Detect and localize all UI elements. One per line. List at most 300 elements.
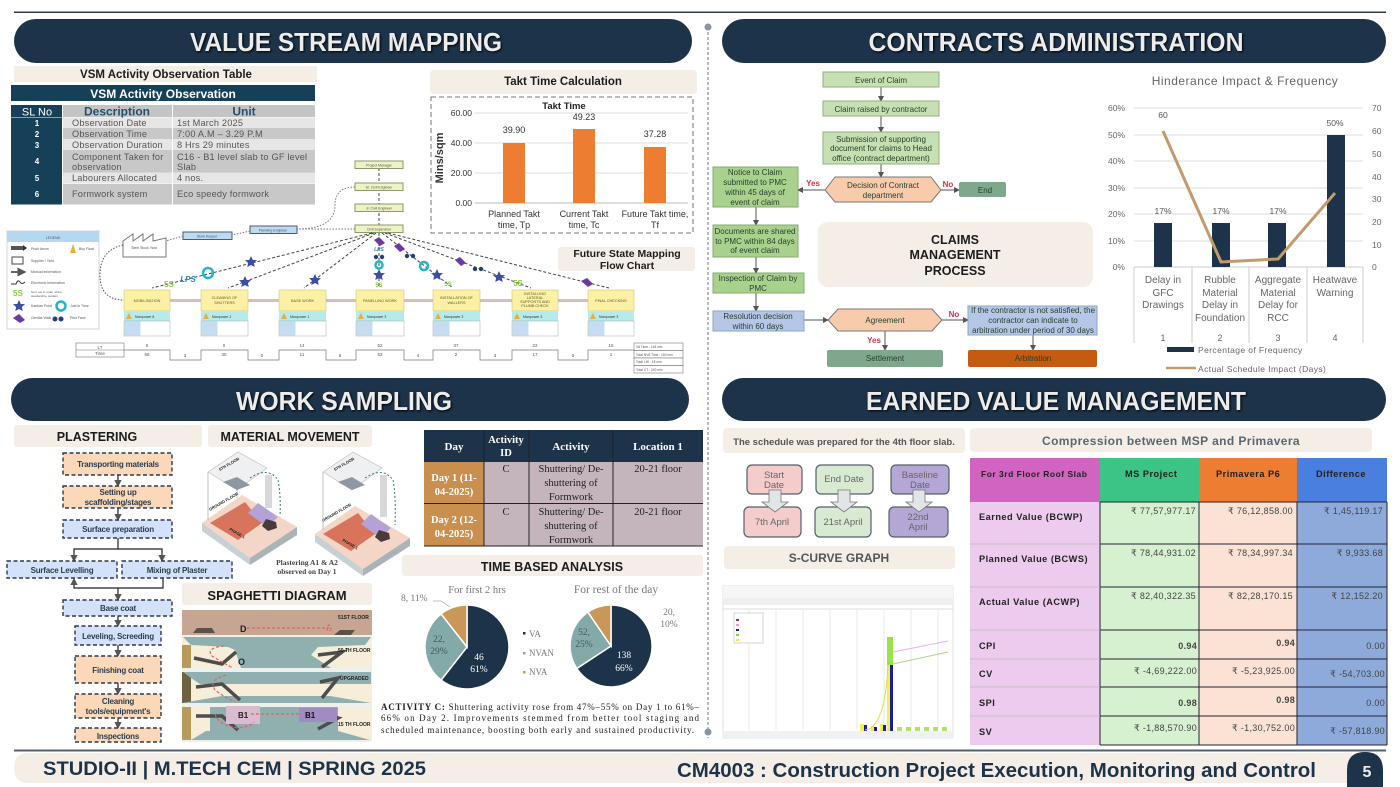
- hindrance impact chart: RCC: [1267, 313, 1289, 324]
- hindrance impact chart: 17%: [1154, 206, 1172, 216]
- comparison between MSP and Primavera: 0.00: [1366, 698, 1385, 708]
- takt time chart: 60.00: [451, 108, 472, 118]
- activity note: 66% on Day 2. Improvements stemmed from better tool staging and: [381, 713, 700, 723]
- hindrance impact chart: 30%: [1108, 183, 1125, 193]
- spaghetti diagram: O: [238, 657, 245, 667]
- comparison between MSP and Primavera: 0.94: [1276, 638, 1295, 648]
- timeline ladder: 15: [608, 343, 614, 348]
- takt time chart: time, Tc: [569, 220, 600, 230]
- comparison between MSP and Primavera: SV: [979, 727, 993, 737]
- footer: [14, 750, 1386, 787]
- comparison between MSP and Primavera: ₹ 82,28,170.15: [1228, 591, 1293, 601]
- hindrance impact chart: 20: [1372, 217, 1382, 227]
- comparison between MSP and Primavera: CV: [979, 669, 993, 679]
- plastering flow: Surface preparation: [82, 525, 154, 534]
- comparison between MSP and Primavera: Difference: [1316, 469, 1366, 479]
- process boxes: LATERAL: [527, 296, 543, 300]
- comparison between MSP and Primavera: ₹ 78,34,997.34: [1228, 548, 1293, 558]
- observation table: 5: [35, 174, 40, 183]
- hindrance impact chart: Rubble: [1204, 275, 1236, 286]
- claims flowchart: If the contractor is not satisfied, the: [971, 306, 1096, 315]
- hindrance impact chart: 70: [1372, 103, 1382, 113]
- hindrance impact chart: 10%: [1108, 236, 1125, 246]
- comparison between MSP and Primavera: ₹ 12,152.20: [1331, 591, 1383, 601]
- plastering flow: Mixing of Plaster: [147, 566, 207, 575]
- timeline ladder: [76, 343, 683, 373]
- hindrance impact chart: Aggregate: [1255, 275, 1302, 286]
- spaghetti diagram: B1: [238, 711, 249, 720]
- organisation chain: [100, 161, 403, 300]
- hindrance impact chart: Delay in: [1202, 300, 1238, 311]
- takt time chart: 49.23: [573, 112, 595, 122]
- activity table: 20-21 floor: [634, 507, 682, 518]
- process boxes: BASE WORK: [291, 299, 314, 303]
- claims flowchart: Event of Claim: [855, 76, 907, 85]
- claims flowchart: document for claims to Head: [830, 144, 932, 153]
- hindrance impact chart: Heatwave: [1313, 275, 1358, 286]
- activity table: Day 2 (12-: [431, 515, 478, 526]
- hindrance impact chart: Actual Schedule Impact (Days): [1198, 364, 1326, 374]
- observation table: 3: [35, 141, 40, 150]
- observation table: SL No: [22, 106, 52, 118]
- schedule dates: Date: [764, 480, 784, 491]
- comparison between MSP and Primavera: ₹ 9,933.68: [1337, 548, 1383, 558]
- plastering flow: Finishing coat: [92, 666, 144, 675]
- hindrance impact chart: 17%: [1269, 206, 1287, 216]
- timeline ladder: 17: [532, 352, 538, 357]
- legend: Just in Time: [70, 304, 89, 308]
- claims flowchart: Agreement: [865, 316, 905, 325]
- activity table: shuttering of: [544, 521, 598, 532]
- timeline ladder: 6: [339, 353, 342, 358]
- page number: [1347, 752, 1383, 787]
- schedule dates: 22nd: [907, 512, 929, 523]
- time based analysis: TIME BASED ANALYSIS: [481, 560, 623, 574]
- process boxes: Manpower 3: [367, 315, 386, 319]
- future state label: Future State Mapping: [573, 248, 681, 260]
- information lines and kaizen markers: 5S: [164, 280, 175, 289]
- claims flowchart: Submission of supporting: [836, 135, 926, 144]
- activity table: C: [502, 464, 510, 475]
- timeline ladder: 14: [299, 343, 305, 348]
- activity table: Shuttering/ De-: [538, 464, 604, 475]
- observation table: 7:00 A.M – 3.29 P.M: [177, 129, 263, 139]
- comparison between MSP and Primavera: ₹ 77,57,977.17: [1131, 506, 1196, 516]
- activity note: ACTIVITY C: Shuttering activity rose from 47%–55% on Day 1 to 61%–: [381, 702, 700, 712]
- hindrance impact chart: Delay in: [1145, 275, 1181, 286]
- process boxes: CLEANING OF: [212, 296, 238, 300]
- hindrance impact chart: 40: [1372, 172, 1382, 182]
- process boxes: PANELLING WORK: [363, 299, 397, 303]
- time based analysis: 138: [617, 651, 631, 661]
- timeline ladder: 1: [610, 352, 613, 357]
- schedule dates: The schedule was prepared for the 4th floor slab.: [733, 437, 955, 448]
- observation table: VSM Activity Observation: [90, 87, 236, 101]
- comparison between MSP and Primavera: 0.98: [1178, 698, 1197, 708]
- observation table: 2: [35, 130, 40, 139]
- comparison between MSP and Primavera: Planned Value (BCWS): [979, 554, 1088, 564]
- claims flowchart: Inspection of Claim by: [719, 274, 797, 283]
- hindrance impact chart: 50%: [1108, 130, 1125, 140]
- schedule dates: Date: [910, 480, 930, 491]
- timeline ladder: LT: [98, 345, 103, 350]
- observation table: 6: [35, 190, 40, 199]
- observation table: VSM Activity Observation Table: [80, 69, 252, 81]
- pie legend: VA: [529, 629, 541, 639]
- claims flowchart: No: [949, 310, 959, 319]
- time based analysis: 25%: [575, 640, 593, 650]
- hindrance impact chart: Drawings: [1142, 300, 1184, 311]
- activity table: 20-21 floor: [634, 464, 682, 475]
- hindrance impact chart: Warning: [1317, 288, 1353, 299]
- claims flowchart: office (contract department): [832, 154, 930, 163]
- observation table: Slab: [177, 162, 196, 172]
- organisation chain: Civil Supervisor: [367, 228, 392, 232]
- comparison between MSP and Primavera: Compression between MSP and Primavera: [1042, 434, 1300, 448]
- timeline ladder: Total LHI : 18 min: [636, 360, 662, 364]
- footer: CM4003 : Construction Project Execution, Monitoring and Control: [677, 759, 1316, 782]
- timeline ladder: Total CT : 240 min: [636, 368, 663, 372]
- hindrance impact chart: 2: [1217, 333, 1223, 343]
- plastering flow: Surface Levelling: [31, 566, 94, 575]
- hindrance impact chart: 60%: [1108, 103, 1125, 113]
- timeline ladder: 3: [494, 353, 497, 358]
- panel: work sampling: [7, 378, 703, 742]
- pie legend: NVA: [529, 667, 548, 677]
- pie legend: NVAN: [529, 648, 554, 658]
- takt time chart: 37.28: [644, 129, 666, 139]
- claims management label: MANAGEMENT: [910, 248, 1001, 262]
- isometric diagram A1: [202, 452, 297, 565]
- process boxes: Manpower 3: [599, 315, 618, 319]
- hindrance impact chart: Hinderance Impact & Frequency: [1152, 74, 1338, 88]
- process boxes: FINAL CHECKING: [595, 299, 627, 303]
- hindrance impact chart: 3: [1275, 333, 1281, 343]
- time based analysis: 29%: [430, 647, 448, 657]
- activity table: Activity: [552, 441, 590, 453]
- claims flowchart: End: [978, 186, 992, 195]
- hindrance impact chart: GFC: [1152, 288, 1174, 299]
- heading: contracts administration: [722, 19, 1386, 63]
- activity table: Location 1: [633, 441, 683, 453]
- timeline ladder: 0: [223, 343, 226, 348]
- organisation chain: Steel Stock Yard: [131, 246, 157, 250]
- schedule dates: 7th April: [755, 517, 789, 528]
- process boxes: [124, 290, 634, 336]
- isometric diagram A1: PHASE 1: [228, 527, 246, 540]
- information lines and kaizen markers: LPS: [180, 275, 196, 284]
- comparison between MSP and Primavera: ₹ 76,12,858.00: [1228, 506, 1293, 516]
- time based analysis: 52,: [578, 628, 590, 638]
- timeline ladder: 3: [184, 353, 187, 358]
- claims flowchart: Documents are shared: [715, 227, 795, 236]
- organisation chain: Sr. Civil Engineer: [366, 186, 393, 190]
- activity table: Formwork: [549, 535, 594, 546]
- time based analysis: [401, 555, 703, 689]
- plastering flow: Setting up: [99, 488, 137, 497]
- hindrance impact chart: 30: [1372, 194, 1382, 204]
- schedule dates: End Date: [824, 474, 864, 485]
- spaghetti diagram: B1: [305, 711, 316, 720]
- legend: 5S: [13, 289, 23, 298]
- claims flowchart: Settlement: [866, 354, 905, 363]
- schedule dates: Start: [764, 470, 784, 481]
- process boxes: SUPPORTS AND: [520, 300, 550, 304]
- comparison between MSP and Primavera: 0.98: [1276, 695, 1295, 705]
- process boxes: INSTALLATION OF: [440, 296, 474, 300]
- takt time chart: Tf: [651, 220, 659, 230]
- observation table: Observation Duration: [72, 140, 163, 150]
- timeline ladder: 37: [453, 343, 459, 348]
- activity table: ID: [500, 448, 512, 459]
- takt time chart: [430, 70, 697, 233]
- hindrance impact chart: 4: [1332, 333, 1338, 343]
- activity table: Shuttering/ De-: [538, 507, 604, 518]
- hindrance impact chart: 50: [1372, 149, 1382, 159]
- observation table: Observation Time: [72, 129, 147, 139]
- claims flowchart: arbitration under period of 30 days: [972, 326, 1094, 335]
- schedule dates: Baseline: [902, 470, 938, 481]
- timeline ladder: 68: [144, 352, 150, 357]
- takt time chart: 20.00: [451, 168, 472, 178]
- panel: value stream mapping: [7, 19, 697, 373]
- heading: value stream mapping: [14, 19, 692, 63]
- plastering flow: [7, 425, 232, 742]
- observation table: Unit: [232, 104, 256, 118]
- time based analysis: 46: [474, 653, 484, 663]
- time based analysis: 20,: [663, 608, 675, 618]
- takt time chart: time, Tp: [498, 220, 530, 230]
- hindrance impact chart: 0: [1372, 262, 1377, 272]
- observation table: 4 nos.: [177, 173, 203, 183]
- isometric diagram A1: 5TH FLOOR: [218, 456, 240, 472]
- hindrance impact chart: 40%: [1108, 156, 1125, 166]
- claims flowchart: PMC: [749, 284, 767, 293]
- information lines and kaizen markers: 5S: [513, 279, 524, 288]
- time based analysis: 66%: [615, 664, 633, 674]
- plastering flow: PLASTERING: [57, 430, 137, 444]
- legend: Pilot Face: [70, 316, 86, 320]
- s-curve graph: [723, 546, 955, 738]
- timeline ladder: 0: [261, 353, 264, 358]
- isometric diagram A2: [315, 452, 410, 576]
- claims flowchart: department: [863, 191, 904, 200]
- future state label: [558, 247, 695, 272]
- legend: Supplier / Yard: [31, 259, 54, 263]
- pie: first 2 hours: [425, 605, 509, 689]
- claims management label: [818, 222, 1093, 287]
- activity table: C: [502, 507, 510, 518]
- claims flowchart: Resolution decision: [723, 312, 793, 321]
- observation table: 1st March 2025: [177, 118, 243, 128]
- process boxes: Manpower 6: [135, 315, 154, 319]
- takt time chart: 39.90: [503, 125, 525, 135]
- hindrance impact chart: Foundation: [1195, 313, 1245, 324]
- legend: LEGEND: [46, 236, 61, 240]
- time based analysis: For first 2 hrs: [448, 585, 506, 596]
- takt time chart: Planned Takt: [488, 209, 540, 219]
- hindrance impact chart: 50%: [1326, 118, 1344, 128]
- comparison between MSP and Primavera: ₹ 82,40,322.35: [1131, 591, 1196, 601]
- spaghetti diagram: 15 TH FLOOR: [338, 722, 371, 728]
- information lines and kaizen markers: LPS: [374, 247, 385, 253]
- activity table: shuttering of: [544, 478, 598, 489]
- schedule dates: [723, 428, 965, 537]
- plastering flow: Leveling, Screeding: [82, 632, 154, 641]
- panel: contracts administration: [713, 19, 1386, 374]
- activity table: Day 1 (11-: [431, 473, 477, 484]
- claims flowchart: Decision of Contract: [847, 181, 920, 190]
- timeline ladder: 22: [532, 343, 538, 348]
- material movement: Plastering A1 & A2: [276, 558, 338, 567]
- observation table: Description: [84, 104, 150, 118]
- timeline ladder: 53: [377, 352, 383, 357]
- material movement: observed on Day 1: [278, 567, 337, 576]
- plastering flow: Transporting materials: [77, 460, 160, 469]
- activity table: [424, 430, 703, 546]
- isometric diagram A2: PHASE 1: [342, 538, 359, 551]
- claims flowchart: No: [943, 180, 953, 189]
- hindrance impact chart: 1: [1160, 333, 1166, 343]
- claims management label: CLAIMS: [931, 233, 979, 247]
- claims management label: PROCESS: [924, 264, 986, 278]
- legend: standardize, sustain: [31, 294, 58, 298]
- heading: contracts administration: CONTRACTS ADMINISTRATION: [868, 27, 1244, 57]
- heading: value stream mapping: VALUE STREAM MAPPING: [190, 27, 502, 57]
- claims flowchart: within 45 days of: [724, 188, 786, 197]
- takt time chart: 40.00: [451, 138, 472, 148]
- heading: work sampling: WORK SAMPLING: [236, 386, 452, 416]
- activity table: Activity: [488, 435, 525, 446]
- organisation chain: Store Keeper: [197, 234, 218, 238]
- process boxes: SHUTTERS: [214, 301, 235, 305]
- timeline ladder: 52: [377, 343, 383, 348]
- comparison between MSP and Primavera: MS Project: [1125, 469, 1177, 479]
- footer: STUDIO-II | M.TECH CEM | SPRING 2025: [43, 758, 426, 780]
- legend: Push Arrow: [31, 247, 49, 251]
- timeline ladder: Total NVA Time : 160 min: [636, 353, 673, 357]
- future state label: Flow Chart: [600, 260, 655, 272]
- activity table: 04-2025): [435, 487, 474, 498]
- plastering flow: tools/equipment's: [86, 707, 151, 716]
- comparison between MSP and Primavera: 0.94: [1178, 641, 1197, 651]
- legend: Buy Float: [79, 247, 94, 251]
- legend: Gemba Walk: [31, 316, 51, 320]
- observation table: 4: [35, 157, 40, 166]
- comparison between MSP and Primavera: ₹ 78,44,931.02: [1131, 548, 1196, 558]
- process boxes: Manpower 2: [212, 315, 231, 319]
- activity note: [381, 702, 700, 735]
- timeline ladder: 0: [146, 343, 149, 348]
- spaghetti diagram: [178, 583, 372, 742]
- comparison between MSP and Primavera: Earned Value (BCWP): [979, 512, 1083, 522]
- time based analysis: For rest of the day: [574, 584, 658, 596]
- organisation chain: Jr. Civil Engineer: [366, 206, 393, 210]
- plastering flow: Cleaning: [102, 697, 134, 706]
- comparison between MSP and Primavera: [970, 428, 1387, 745]
- claims flowchart: Yes: [806, 179, 820, 188]
- process boxes: MOBILISATION: [134, 299, 161, 303]
- spaghetti diagram: UPGRADED: [340, 676, 369, 682]
- observation table: Labourers Allocated: [72, 173, 157, 183]
- legend: Manual Information: [31, 270, 61, 274]
- process boxes: Manpower 3: [523, 315, 542, 319]
- time based analysis: 61%: [470, 665, 488, 675]
- isometric diagram A1: GROUND FLOOR: [208, 491, 239, 512]
- process boxes: INSTALLING: [524, 292, 546, 296]
- time based analysis: 22,: [433, 635, 445, 645]
- comparison between MSP and Primavera: Primavera P6: [1216, 469, 1280, 479]
- process boxes: Manpower 3: [444, 315, 463, 319]
- activity table: Day: [445, 441, 464, 453]
- heading: earned value management: EARNED VALUE MANAGEMENT: [866, 386, 1246, 416]
- legend: [7, 231, 99, 329]
- spaghetti diagram: SPAGHETTI DIAGRAM: [207, 588, 347, 603]
- organisation chain: Planning Engineer: [259, 228, 288, 232]
- claims flowchart: within 60 days: [732, 322, 783, 331]
- plastering flow: scaffolding/stages: [85, 498, 152, 507]
- schedule dates: 21st April: [823, 517, 863, 528]
- claims flowchart: Claim raised by contractor: [835, 105, 928, 114]
- hindrance impact chart: Material: [1202, 288, 1238, 299]
- spaghetti diagram: 51ST FLOOR: [338, 615, 369, 621]
- legend: Electronic Information: [31, 281, 65, 285]
- claims flowchart: Notice to Claim: [728, 168, 782, 177]
- observation table: Formwork system: [72, 189, 148, 199]
- observation table: C16 - B1 level slab to GF level: [177, 152, 307, 162]
- comparison between MSP and Primavera: ₹ -54,703.00: [1330, 669, 1385, 679]
- comparison between MSP and Primavera: SPI: [979, 698, 995, 708]
- observation table: [11, 66, 317, 204]
- comparison between MSP and Primavera: ₹ -4,69,222.00: [1134, 666, 1197, 676]
- observation table: 1: [35, 119, 40, 128]
- hindrance impact chart: 17%: [1212, 206, 1230, 216]
- claims flowchart: Arbitration: [1015, 354, 1051, 363]
- timeline ladder: 30: [221, 352, 227, 357]
- information lines and kaizen markers: [152, 233, 609, 289]
- observation table: Component Taken for: [72, 152, 163, 162]
- process boxes: WALLERS: [447, 301, 466, 305]
- isometric diagram A2: 5TH FLOOR: [333, 456, 355, 472]
- comparison between MSP and Primavera: ₹ 1,45,119.17: [1324, 506, 1383, 516]
- hindrance impact chart: Material: [1260, 288, 1296, 299]
- claims flowchart: to PMC within 84 days: [715, 237, 795, 246]
- comparison between MSP and Primavera: ₹ -1,30,752.00: [1232, 723, 1295, 733]
- observation table: Eco speedy formwork: [177, 189, 269, 199]
- heading: earned value management: [722, 378, 1386, 421]
- process boxes: Manpower 1: [290, 315, 309, 319]
- legend: Kanban Point: [31, 304, 52, 308]
- activity table: Formwork: [549, 492, 594, 503]
- comparison between MSP and Primavera: ₹ -57,818.90: [1330, 726, 1385, 736]
- comparison between MSP and Primavera: CPI: [979, 641, 996, 651]
- schedule dates: April: [908, 522, 928, 533]
- claims flowchart: submitted to PMC: [723, 178, 787, 187]
- comparison between MSP and Primavera: Actual Value (ACWP): [979, 597, 1080, 607]
- heading: work sampling: [11, 378, 689, 421]
- activity table: 04-2025): [435, 529, 474, 540]
- comparison between MSP and Primavera: ₹ -5,23,925.00: [1232, 666, 1295, 676]
- organisation chain: Project Manager: [366, 164, 393, 168]
- time based analysis: 8, 11%: [401, 594, 428, 604]
- comparison between MSP and Primavera: For 3rd Floor Roof Slab: [981, 469, 1087, 479]
- plastering flow: Inspections: [97, 732, 140, 741]
- time based analysis: 10%: [660, 620, 678, 630]
- legend: Sort, set in order, shine,: [31, 290, 63, 294]
- hindrance impact chart: Percentage of Frequency: [1198, 345, 1303, 355]
- pie legend: [523, 629, 554, 677]
- information lines and kaizen markers: 5S: [375, 283, 383, 289]
